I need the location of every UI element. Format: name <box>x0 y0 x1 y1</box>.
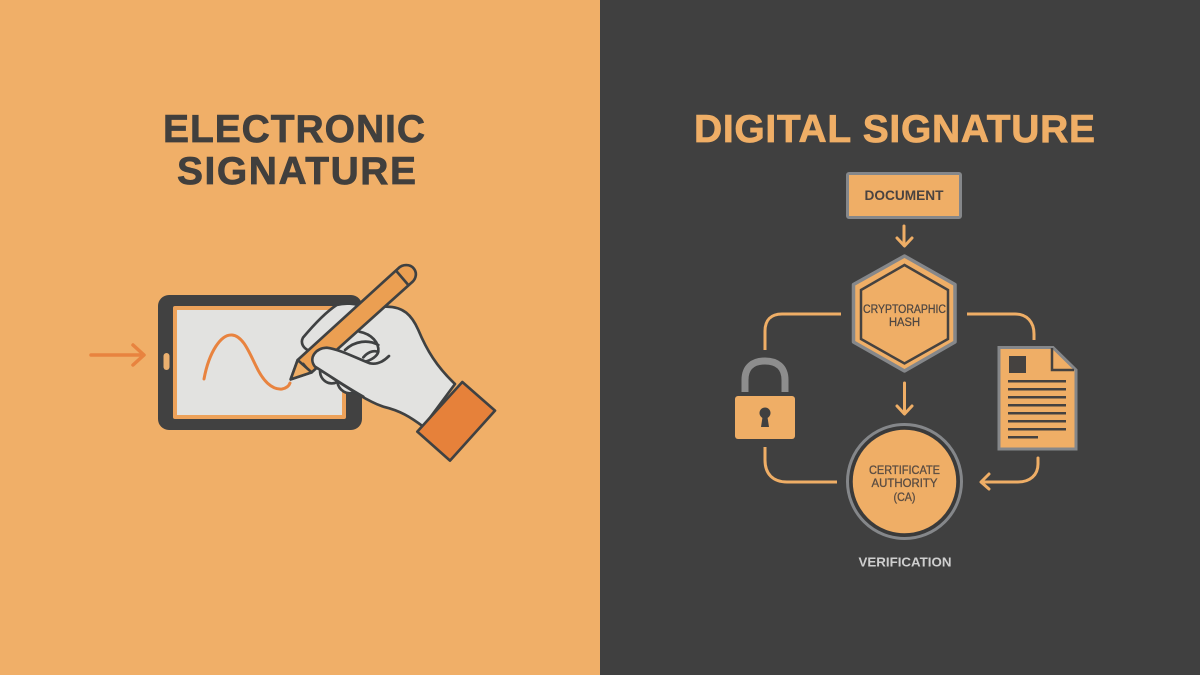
heading: electronic signature <box>163 108 425 193</box>
heading: electronic signature: ELECTRONIC <box>163 108 425 151</box>
icon: hand holding pen <box>291 265 495 461</box>
circle: certificate authority: AUTHORITY <box>872 476 938 490</box>
hexagon: cryptographic hash <box>854 256 955 371</box>
box: document: DOCUMENT <box>864 188 944 203</box>
back of hand and wrist <box>315 307 455 427</box>
connector: lock to certificate authority <box>765 447 837 482</box>
arrow: document to hash <box>897 226 912 246</box>
curled finger lines <box>345 332 378 362</box>
icon: document page <box>999 348 1076 449</box>
sleeve cuff <box>417 382 495 461</box>
icon: padlock <box>735 361 795 439</box>
heading: digital signature: DIGITAL SIGNATURE <box>694 108 1095 151</box>
heading: electronic signature: SIGNATURE <box>177 150 416 193</box>
box: document <box>848 174 960 218</box>
arrow: document page to certificate authority <box>981 458 1038 489</box>
icon: tablet with signature <box>158 295 362 430</box>
signature squiggle <box>204 335 290 389</box>
connector: hash to document page <box>967 314 1034 340</box>
hexagon: cryptographic hash: HASH <box>889 317 920 329</box>
circle: certificate authority: CERTIFICATE <box>869 463 940 477</box>
thumb over pen <box>312 348 390 397</box>
icon: arrow pointing to tablet <box>91 345 144 365</box>
circle: certificate authority <box>848 424 962 538</box>
connector: hash to lock <box>765 314 841 350</box>
circle: certificate authority: (CA) <box>894 490 916 504</box>
hexagon: cryptographic hash: CRYPTORAPHIC <box>863 304 946 316</box>
label: verification: VERIFICATION <box>858 554 952 570</box>
pen <box>291 265 416 379</box>
panel: digital signature <box>600 0 1200 675</box>
index finger <box>302 304 363 351</box>
lower curled fingers <box>320 367 363 393</box>
arrow: hash to certificate authority <box>897 383 912 414</box>
panel: electronic signature <box>0 0 600 675</box>
